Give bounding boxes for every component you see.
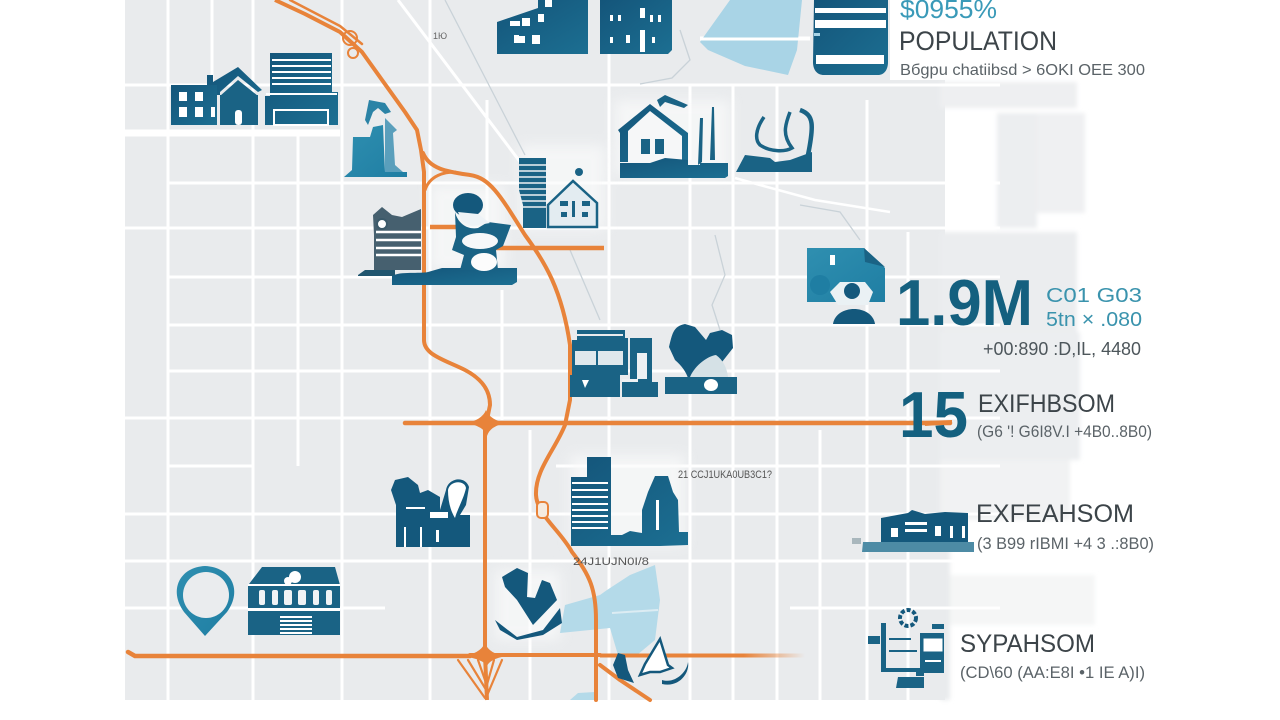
statistic: 15: EXIFHBSOM <box>978 390 1115 418</box>
lake: north <box>700 0 810 75</box>
highway interchange: centre <box>466 410 506 436</box>
icon: museum <box>248 567 340 635</box>
icon: apartment and house <box>171 67 262 125</box>
icon: swoosh <box>495 568 562 640</box>
statistic: 15: 15 <box>899 378 968 451</box>
icon: twin trees and dome <box>665 324 737 394</box>
statistic: 1.9M: +00:890 :D,IL, 4480 <box>983 339 1141 359</box>
statistic: 1.9M: 5tn × .080 <box>1046 309 1142 331</box>
statistic: 15 <box>899 378 1152 451</box>
icon: map pin <box>177 566 234 636</box>
icon: top building right <box>600 0 672 54</box>
icon: industrial cluster <box>391 477 470 547</box>
icon: top building left <box>497 0 588 54</box>
statistic: system label: SYPAHSOM <box>960 630 1095 658</box>
label: skyline north: 21 CCJ1UKA0UB3C1? <box>678 469 772 481</box>
statistic: population: Bбgpu chatiibsd > 6OKI OEE 300 <box>900 62 1145 79</box>
icon: brick block west <box>358 207 421 276</box>
statistic: 1.9M: C01 G03 <box>1046 285 1142 307</box>
icon: high-rise skyline <box>571 457 688 546</box>
icon: stacked hotel <box>265 53 338 125</box>
statistic: station label: EXFEAHSOM <box>976 500 1134 528</box>
icon: desk computer <box>868 610 944 688</box>
icon: civic building <box>570 330 658 397</box>
highway interchange: south <box>462 643 506 666</box>
street grid <box>125 0 1000 700</box>
statistic: station label <box>976 500 1154 553</box>
statistic: system label <box>960 630 1145 682</box>
map background blocks <box>125 0 1095 700</box>
statistic: 1.9M <box>896 266 1142 359</box>
statistic: 1.9M: 1.9M <box>896 266 1033 339</box>
faint rivers and thin lines <box>445 0 860 330</box>
icon: teal tower <box>344 100 407 177</box>
icon: seated person <box>392 193 517 285</box>
statistic: population <box>899 26 1145 79</box>
statistic: 15: (G6 '! G6I8V.I +4B0..8B0) <box>977 422 1152 441</box>
statistic: system label: (CD\60 (AA:E8I •1 IE A)I) <box>960 663 1145 682</box>
icon: storage stack <box>813 0 888 75</box>
highway east fade <box>600 654 805 658</box>
soft light halos around icons <box>430 100 730 640</box>
icon: photo card with person <box>807 248 885 324</box>
statistic: population: POPULATION <box>899 26 1057 56</box>
statistic: station label: (3 B99 rIBMI +4 3 .:8B0) <box>977 534 1154 553</box>
icon: brick tower and cottage <box>519 158 597 228</box>
lake: south <box>560 565 660 700</box>
icon: boat <box>613 639 688 685</box>
label: north road: 1Ю <box>433 31 447 41</box>
label: skyline south: 24J1UJN0I/8 <box>573 556 649 568</box>
icon: house with chimney <box>618 95 728 178</box>
highway network <box>128 0 950 700</box>
icon: curved horseshoe <box>736 110 812 172</box>
icon: station <box>852 510 974 552</box>
